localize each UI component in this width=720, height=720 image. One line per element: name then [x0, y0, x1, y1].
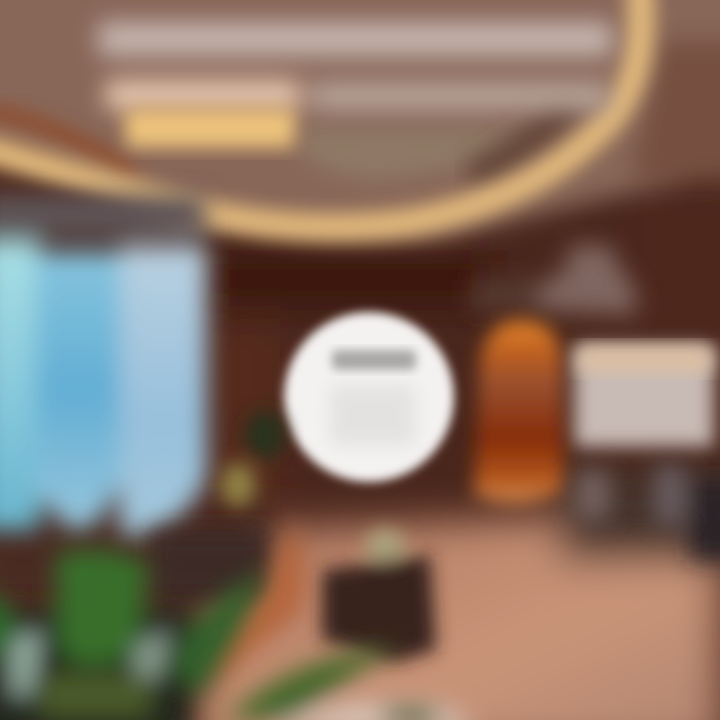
ring shadow [0, 112, 130, 172]
orange chair [190, 520, 303, 680]
text card [574, 345, 714, 447]
card heading band [578, 346, 712, 372]
ceiling light ring [0, 0, 641, 227]
badge disc [284, 312, 454, 482]
badge body text (wording illegible in reference) [330, 385, 415, 445]
window [0, 195, 207, 536]
ring light [0, 0, 641, 227]
furniture [150, 465, 720, 600]
white circle badge [284, 312, 454, 482]
card body [574, 345, 714, 447]
foreground plant leaves [0, 549, 480, 720]
title highlight [125, 108, 295, 148]
title (wording illegible in reference) [98, 22, 613, 110]
small plant [220, 411, 285, 507]
lamp [470, 245, 637, 315]
floor [0, 470, 720, 720]
wall [0, 170, 720, 560]
ceiling [0, 0, 720, 240]
dark table [322, 529, 436, 662]
orange column [474, 320, 564, 504]
ring inner shadow [480, 110, 565, 172]
badge heading (wording illegible in reference) [332, 350, 416, 370]
